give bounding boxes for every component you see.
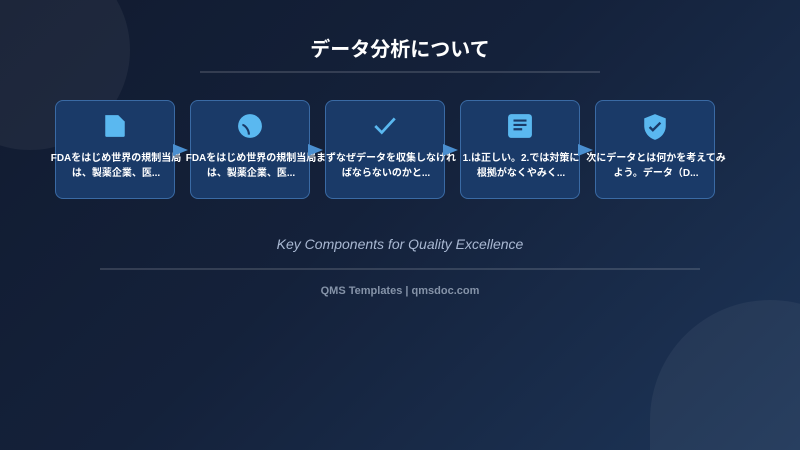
card 1 — [55, 100, 175, 199]
arrow 1 — [173, 144, 188, 156]
icon: check — [374, 118, 396, 134]
text 5 — [586, 152, 726, 179]
text 4 — [463, 152, 579, 179]
text 2: は、製薬企業、医... — [207, 168, 295, 179]
text 1 — [51, 152, 181, 179]
icon: shield — [644, 114, 666, 140]
title: データ分析について — [310, 39, 490, 61]
text 4: 1.は正しい。2.では対策に — [463, 153, 579, 164]
icon: document — [105, 115, 125, 137]
text 1: FDAをはじめ世界の規制当局 — [51, 153, 181, 164]
card 3 — [325, 100, 445, 199]
text 3: ばならないのかと... — [342, 168, 430, 179]
arrow 4 — [578, 144, 593, 156]
arrow 2 — [308, 144, 323, 156]
text 5: 次にデータとは何かを考えてみ — [586, 153, 726, 164]
footer: QMS Templates | qmsdoc.com — [321, 285, 479, 297]
text 2: FDAをはじめ世界の規制当局 — [186, 153, 316, 164]
card 2 — [190, 100, 310, 199]
icon: circle — [238, 114, 262, 138]
icon: list — [508, 114, 532, 138]
arrow 3 — [443, 144, 458, 156]
text 5: よう。データ（D... — [614, 168, 698, 179]
text 4: 根拠がなくやみく... — [477, 168, 565, 179]
card 4 — [460, 100, 580, 199]
text 3 — [316, 152, 456, 179]
text 3: まずなぜデータを収集しなけれ — [316, 153, 456, 164]
text 2 — [186, 152, 316, 179]
card 5 — [595, 100, 715, 199]
subtitle: Key Components for Quality Excellence — [277, 236, 523, 252]
text 1: は、製薬企業、医... — [72, 168, 160, 179]
